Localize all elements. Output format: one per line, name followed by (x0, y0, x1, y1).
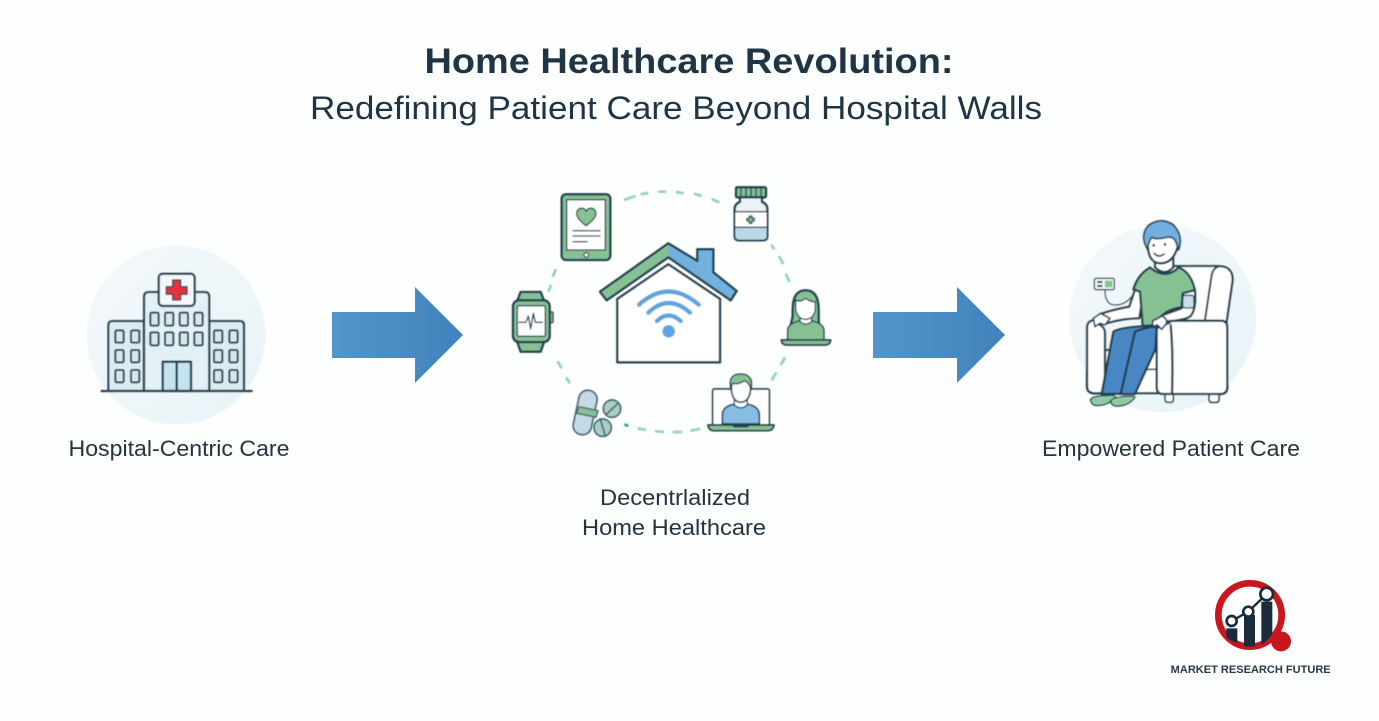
label: decentralized home healthcare (582, 485, 766, 540)
blood pressure monitor (1105, 290, 1132, 305)
icon: doctor on laptop (708, 374, 774, 431)
arrow: home to empowered patient (873, 287, 1005, 383)
title (310, 42, 1042, 126)
logo: market research future (1171, 583, 1331, 676)
armchair (1165, 394, 1219, 402)
icon: pills (571, 389, 621, 436)
title line two: Redefining Patient Care Beyond Hospital Walls (310, 90, 1042, 126)
logo wordmark: MARKET RESEARCH FUTURE (1171, 664, 1331, 676)
icon: house with wifi (600, 243, 737, 362)
icon: tablet with heart (562, 194, 610, 260)
icon: remote caregiver (781, 290, 831, 345)
label: hospital-centric care: Hospital-Centric Care (68, 436, 290, 461)
diagram: decentralized home healthcare (513, 187, 831, 436)
icon: smartwatch (513, 292, 553, 352)
title line one: Home Healthcare Revolution: (424, 42, 954, 81)
label: empowered patient care: Empowered Patient Care (1042, 436, 1300, 461)
icon: patient in armchair (1069, 221, 1256, 412)
arrow: hospital to home (332, 287, 463, 383)
label: decentralized home healthcare: Home Healthcare (582, 515, 766, 540)
dashed care ring (548, 192, 790, 432)
icon: medicine bottle (735, 187, 767, 240)
label: decentralized home healthcare: Decentrlalized (600, 485, 750, 510)
patient (1160, 290, 1195, 322)
icon: hospital (87, 246, 265, 424)
